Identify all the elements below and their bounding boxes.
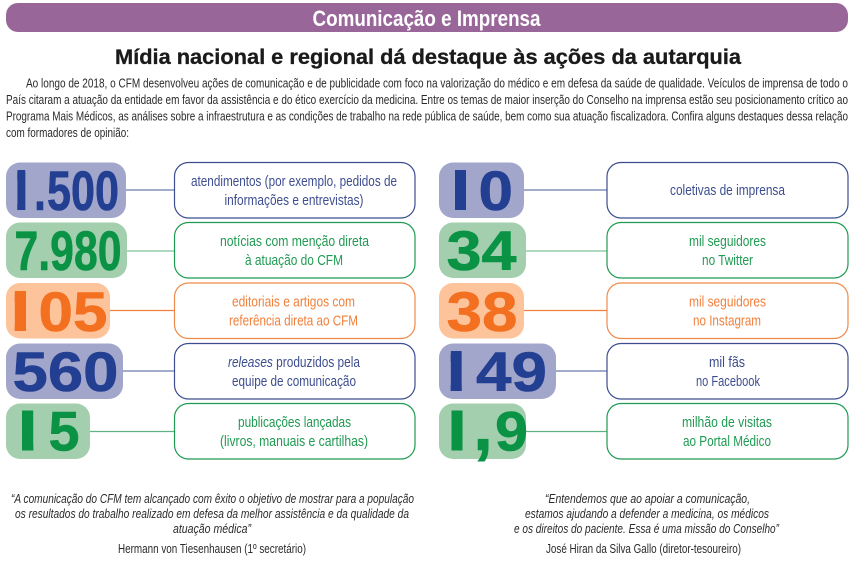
right stat: 10 coletivas: 0 — [478, 159, 513, 222]
left stat: 105 editoriais: 05 — [38, 280, 108, 343]
left stat: 105 editoriais: editoriais e artigos com — [232, 294, 355, 310]
right quote: “Entendemos que ao apoiar a comunicação, — [545, 491, 750, 506]
right stat: 149 Facebook: 1 — [441, 340, 472, 403]
left quote: Hermann von Tiesenhausen (1º secretário) — [118, 541, 306, 556]
right stat: 38 Instagram: 38 — [446, 280, 518, 343]
right stat: 1,9 Portal Médico: 9 — [495, 400, 528, 462]
section header banner — [6, 3, 848, 32]
left quote: “A comunicação do CFM tem alcançado com êxito o objetivo de mostrar para a população — [11, 491, 414, 506]
right stat: 38 Instagram: no Instagram — [693, 312, 761, 330]
left quote: atuação médica” — [173, 521, 252, 536]
right stat: 10 coletivas: coletivas de imprensa — [670, 182, 786, 199]
left stat: 105 editoriais: 1 — [5, 280, 36, 343]
left stat: 1.500 atendimentos: informações e entrevistas) — [224, 192, 364, 209]
right stat: 34 Twitter — [439, 219, 848, 282]
left stat: 105 editoriais: referência direta ao CFM — [229, 312, 358, 330]
right quote: José Hiran da Silva Gallo (diretor-tesoureiro) — [546, 541, 741, 556]
left stat: 15 publicações: 5 — [48, 400, 80, 462]
left quote — [11, 491, 414, 556]
right stat: 149 Facebook: mil fãs — [709, 354, 745, 371]
left stat: 560 releases — [6, 340, 415, 403]
right stat: 38 Instagram: mil seguidores — [689, 294, 766, 310]
right stat: 149 Facebook: 49 — [476, 340, 547, 403]
right stat: 34 Twitter: mil seguidores — [689, 233, 766, 250]
left stat: 7.980 notícias: à atuação do CFM — [245, 252, 343, 269]
left quote: os resultados do trabalho realizado em defesa da melhor assistência e da qualidade da — [15, 506, 409, 521]
right quote: e os direitos do paciente. Essa é uma missão do Conselho” — [514, 521, 780, 536]
section header banner: Comunicação e Imprensa — [312, 6, 541, 31]
left stat: 560 releases: releases produzidos pela — [228, 354, 361, 371]
left stat: 7.980 notícias: notícias com menção direta — [220, 233, 370, 250]
right stat: 34 Twitter: 34 — [446, 219, 516, 282]
intro paragraph — [6, 76, 848, 140]
right stat: 34 Twitter: no Twitter — [702, 252, 753, 269]
left stat: 7.980 notícias: 7.980 — [14, 219, 122, 282]
intro paragraph: com formadores de opinião: — [6, 125, 129, 140]
right stat: 1,9 Portal Médico: ao Portal Médico — [683, 433, 771, 450]
right stat: 38 Instagram — [439, 280, 848, 343]
left stat: 1.500 atendimentos: 1 — [6, 159, 37, 222]
left stat: 105 editoriais — [5, 280, 415, 343]
right stat: 149 Facebook — [439, 340, 848, 403]
title: Mídia nacional e regional dá destaque às ações da autarquia — [115, 46, 741, 69]
left stat: 1.500 atendimentos: atendimentos (por exemplo, pedidos de — [191, 173, 397, 190]
right stat: 1,9 Portal Médico: milhão de visitas — [682, 414, 772, 431]
right quote: estamos ajudando a defender a medicina, os médicos — [525, 506, 769, 521]
left stat: 1.500 atendimentos: 500 — [47, 159, 119, 222]
left stat: 560 releases: equipe de comunicação — [232, 373, 356, 390]
left stat: 1.500 atendimentos — [6, 159, 415, 222]
left stat: 15 publicações: 1 — [12, 400, 43, 462]
right stat: 149 Facebook: no Facebook — [696, 373, 760, 390]
right stat: 10 coletivas: 1 — [445, 159, 476, 222]
left stat: 1.500 atendimentos: . — [34, 159, 46, 222]
right stat: 1,9 Portal Médico — [439, 386, 848, 466]
right stat: 1,9 Portal Médico: , — [473, 386, 493, 466]
right stat: 10 coletivas — [439, 159, 848, 222]
right stat: 1,9 Portal Médico: 1 — [441, 400, 473, 462]
left stat: 15 publicações: (livros, manuais e cartilhas) — [220, 433, 368, 450]
left stat: 15 publicações: publicações lançadas — [238, 414, 351, 431]
left stat: 15 publicações — [6, 400, 415, 462]
left stat: 7.980 notícias — [6, 219, 415, 282]
right quote — [514, 491, 780, 556]
left stat: 560 releases: 560 — [12, 340, 118, 403]
